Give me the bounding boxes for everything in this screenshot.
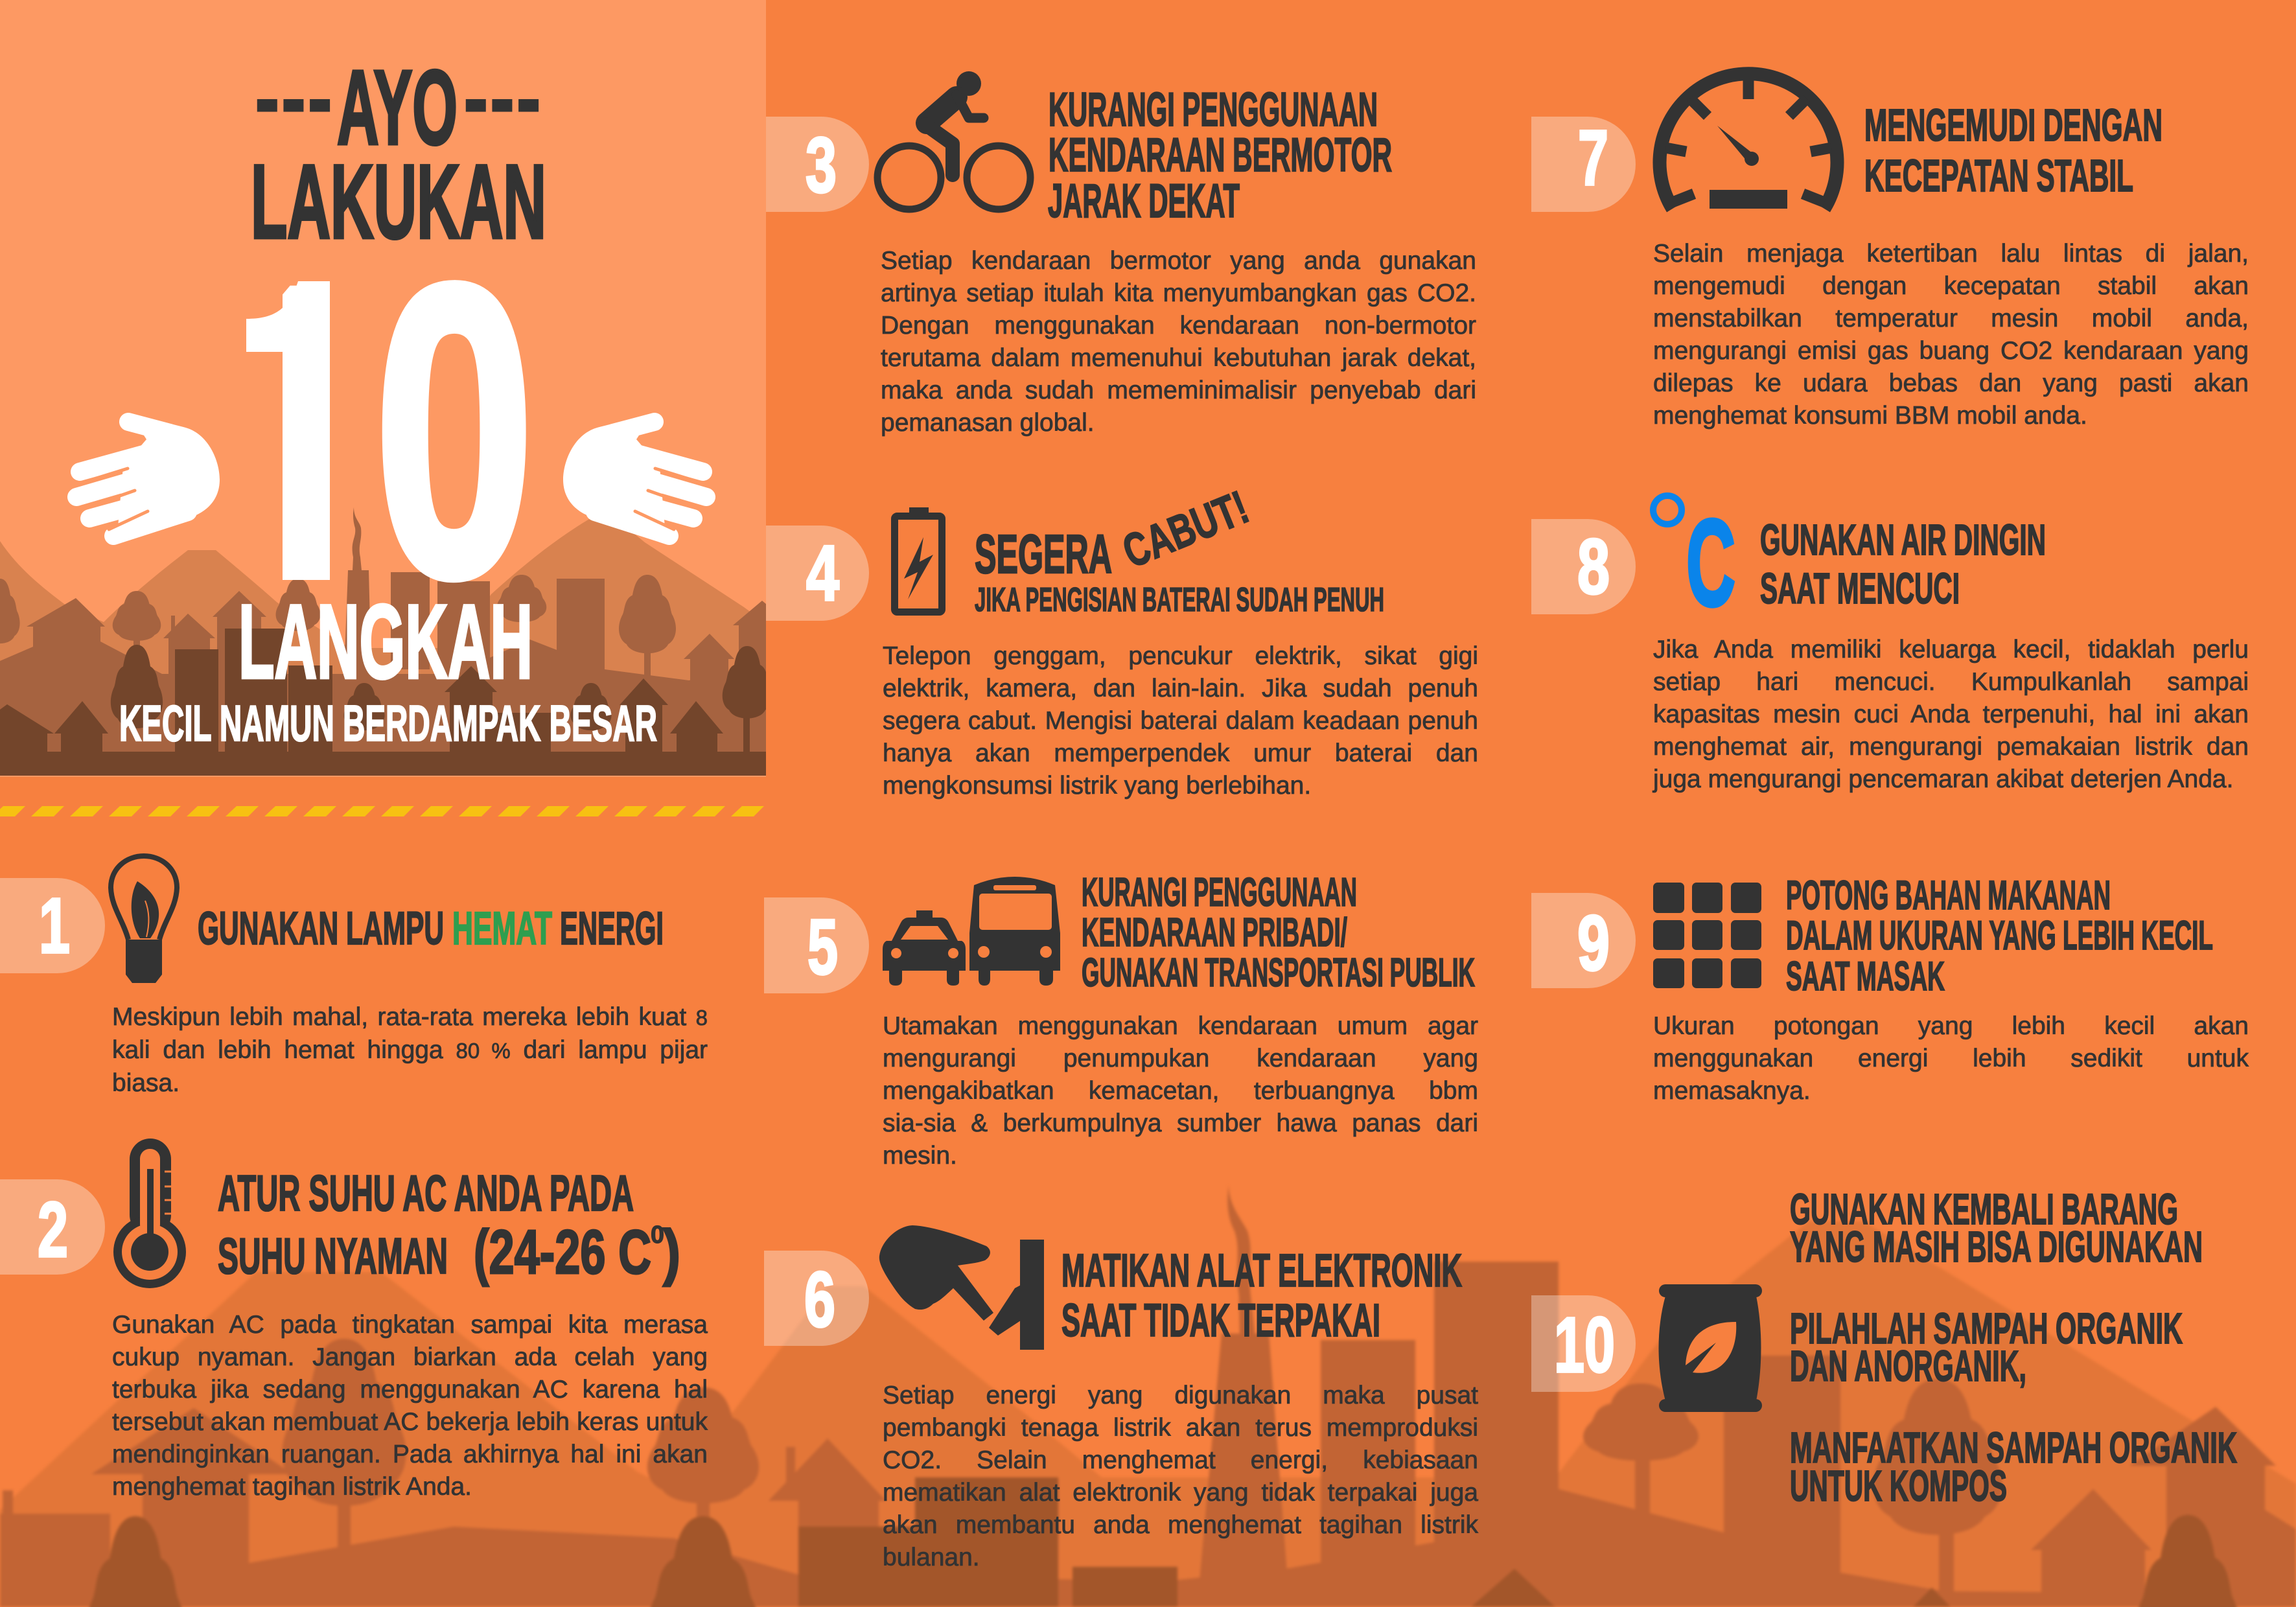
heading 5: KURANGI PENGGUNAAN bbox=[1082, 870, 1357, 915]
badge 1 bbox=[0, 878, 105, 973]
text block: step 5: mengurangi penumpukan kendaraan yang bbox=[883, 1045, 1478, 1072]
text block: step 9: menggunakan energi lebih sedikit untuk bbox=[1653, 1045, 2249, 1072]
badge 7 bbox=[1531, 113, 1636, 212]
badge 10: 10 bbox=[1554, 1301, 1615, 1389]
heading 2: SUHU NYAMAN bbox=[218, 1227, 448, 1284]
badge 2: 2 bbox=[38, 1185, 68, 1273]
heading 2: ) bbox=[663, 1218, 680, 1287]
text block: step 7: menghemat konsumi BBM mobil anda. bbox=[1653, 402, 2087, 430]
text block: step 8: setiap hari mencuci. Kumpulkanlah sampai bbox=[1653, 668, 2249, 696]
text block: step 6: mematikan alat elektronik yang tidak terpakai juga bbox=[883, 1479, 1478, 1507]
heading 6: SAAT TIDAK TERPAKAI bbox=[1061, 1295, 1380, 1347]
title: ayo: --- bbox=[254, 37, 333, 156]
panel: title panel bbox=[0, 0, 772, 777]
text block: step 8: juga mengurangi pencemaran akibat deterjen Anda. bbox=[1653, 765, 2233, 793]
heading 4: CABUT! bbox=[1116, 481, 1255, 578]
text block: step 1 bbox=[112, 1003, 708, 1097]
heading 2: (24-26 C bbox=[474, 1218, 651, 1287]
step 7 bbox=[1531, 74, 2163, 212]
step 1 bbox=[0, 856, 664, 983]
icon: left hand bbox=[76, 413, 220, 542]
text block: step 2: Gunakan AC pada tingkatan sampai kita merasa bbox=[112, 1311, 708, 1339]
heading 8: GUNAKAN AIR DINGIN bbox=[1760, 516, 2046, 564]
text block: step 1: Meskipun lebih mahal, rata-rata mereka lebih kuat 8 bbox=[112, 1003, 708, 1031]
heading 4 bbox=[975, 481, 1384, 619]
heading 4: SEGERA bbox=[975, 524, 1112, 584]
badge 5: 5 bbox=[807, 903, 838, 991]
badge 4 bbox=[766, 526, 869, 621]
text block: step 7: mengurangi emisi gas buang CO2 kendaraan yang bbox=[1653, 337, 2249, 365]
heading 2: 0 bbox=[651, 1221, 664, 1249]
text block: step 4: mengkonsumsi listrik yang berlebihan. bbox=[883, 772, 1311, 800]
text block: step 6: CO2. Selain menghemat energi, kebiasaan bbox=[883, 1446, 1478, 1474]
text block: step 7: Selain menjaga ketertiban lalu lintas di jalan, bbox=[1653, 240, 2249, 268]
title: langkah: LANGKAH bbox=[238, 583, 533, 700]
badge 3 bbox=[766, 117, 869, 212]
badge 1: 1 bbox=[39, 881, 70, 969]
text block: step 8: menghemat air, mengurangi pemakaian listrik dan bbox=[1653, 733, 2249, 761]
badge 6 bbox=[764, 1251, 869, 1346]
heading 5: KENDARAAN PRIBADI/ bbox=[1082, 910, 1347, 955]
text block: step 4: Telepon genggam, pencukur elektrik, sikat gigi bbox=[883, 642, 1478, 670]
step 3 bbox=[766, 71, 1392, 227]
text block: step 1: kali dan lebih hemat hingga 80 % dari lampu pijar bbox=[112, 1036, 708, 1064]
heading 7 bbox=[1864, 100, 2163, 201]
step 5 bbox=[764, 870, 1475, 995]
text block: step 3: artinya setiap itulah kita menyumbangkan gas CO2. bbox=[881, 279, 1476, 307]
text block: step 7: mengemudi dengan kecepatan stabil akan bbox=[1653, 272, 2249, 300]
heading 8: SAAT MENCUCI bbox=[1760, 564, 1960, 613]
heading 3: KURANGI PENGGUNAAN bbox=[1049, 84, 1378, 136]
heading 4: JIKA PENGISIAN BATERAI SUDAH PENUH bbox=[975, 581, 1384, 619]
icon: degree celsius bbox=[1653, 494, 1735, 632]
text block: step 3: terutama dalam memenuhui kebutuhan jarak dekat, bbox=[881, 344, 1476, 372]
decorative stripe: yellow hazard line bbox=[0, 806, 764, 816]
text block: step 4: hanya akan memperpendek umur baterai dan bbox=[883, 739, 1478, 767]
big number 10: 0 bbox=[374, 199, 535, 662]
text block: step 5: sia-sia & berkumpulnya sumber hawa panas dari bbox=[883, 1109, 1478, 1137]
heading 10: DAN ANORGANIK, bbox=[1790, 1342, 2026, 1391]
text block: step 8: kapasitas mesin cuci Anda terpenuhi, hal ini akan bbox=[1653, 700, 2249, 728]
badge 2 bbox=[0, 1179, 105, 1275]
text block: step 4 bbox=[883, 642, 1478, 800]
badge 5 bbox=[764, 897, 869, 993]
text block: step 3: Setiap kendaraan bermotor yang anda gunakan bbox=[881, 247, 1476, 275]
badge 8: 8 bbox=[1577, 522, 1610, 610]
step 4 bbox=[766, 481, 1384, 621]
heading 8 bbox=[1760, 516, 2046, 613]
icon: degree celsius: C bbox=[1686, 494, 1735, 632]
heading 6 bbox=[1061, 1245, 1462, 1347]
big number 10: 1 bbox=[236, 200, 363, 664]
title: ayo: --- bbox=[463, 37, 542, 156]
icon: compost bag bbox=[1659, 1284, 1762, 1412]
heading 3 bbox=[1048, 84, 1392, 227]
heading 2 bbox=[218, 1164, 680, 1287]
heading 5: GUNAKAN TRANSPORTASI PUBLIK bbox=[1082, 951, 1475, 995]
text block: step 2: terbuka jika sedang menggunakan AC karena hal bbox=[112, 1376, 708, 1404]
text block: step 3 bbox=[881, 247, 1476, 437]
badge 6: 6 bbox=[804, 1255, 835, 1343]
background city silhouette bbox=[0, 1185, 2296, 1607]
heading 1: ENERGI bbox=[560, 903, 664, 954]
text block: step 8 bbox=[1652, 636, 2249, 793]
icon: speedometer bbox=[1660, 74, 1837, 209]
heading 9 bbox=[1786, 873, 2213, 999]
heading 10: UNTUK KOMPOS bbox=[1790, 1462, 2007, 1510]
step 6 bbox=[764, 1225, 1462, 1350]
text block: step 7: dilepas ke udara bebas dan yang pasti akan bbox=[1653, 369, 2249, 397]
text block: step 3: pemanasan global. bbox=[881, 409, 1095, 437]
text block: step 6: pembangki tenaga listrik akan terus memproduksi bbox=[883, 1414, 1478, 1442]
badge 8 bbox=[1531, 519, 1636, 614]
heading 3: JARAK DEKAT bbox=[1048, 175, 1240, 227]
text block: step 6: bulanan. bbox=[883, 1543, 980, 1571]
badge 4: 4 bbox=[806, 529, 839, 617]
title: ayo: AYO bbox=[337, 48, 458, 167]
icon: cyclist bbox=[877, 71, 1030, 209]
step 9 bbox=[1531, 873, 2213, 999]
heading 9: SAAT MASAK bbox=[1786, 954, 1945, 999]
heading 6: MATIKAN ALAT ELEKTRONIK bbox=[1061, 1245, 1462, 1297]
icon: bus bbox=[969, 877, 1060, 986]
text block: step 7: menstabilkan temperatur mesin mobil anda, bbox=[1653, 305, 2249, 332]
icon: cut pieces grid bbox=[1653, 883, 1761, 988]
text block: step 9: memasaknya. bbox=[1653, 1077, 1811, 1105]
text block: step 1: biasa. bbox=[112, 1069, 180, 1097]
title: ayo bbox=[254, 37, 542, 167]
icon: taxi bbox=[883, 910, 966, 986]
heading 1: HEMAT bbox=[452, 903, 552, 954]
text block: step 9: Ukuran potongan yang lebih kecil akan bbox=[1653, 1012, 2249, 1040]
badge 3: 3 bbox=[806, 121, 837, 209]
text block: step 2: menghemat tagihan listrik Anda. bbox=[112, 1473, 472, 1501]
badge 9 bbox=[1531, 893, 1636, 988]
badge 9: 9 bbox=[1577, 899, 1610, 987]
heading 2: ATUR SUHU AC ANDA PADA bbox=[218, 1164, 634, 1221]
text block: step 7 bbox=[1653, 240, 2249, 430]
text block: step 5: mengakibatkan kemacetan, terbuangnya bbm bbox=[883, 1077, 1478, 1105]
text block: step 8: Jika Anda memiliki keluarga kecil, tidaklah perlu bbox=[1653, 636, 2249, 664]
text block: step 3: Dengan menggunakan kendaraan non-bermotor bbox=[881, 312, 1476, 340]
heading 1: GUNAKAN LAMPU bbox=[198, 903, 444, 954]
text block: step 5: Utamakan menggunakan kendaraan umum agar bbox=[883, 1012, 1478, 1040]
badge 10 bbox=[1531, 1295, 1636, 1392]
icon: thermometer bbox=[113, 1139, 186, 1288]
text block: step 4: segera cabut. Mengisi baterai dalam keadaan penuh bbox=[883, 707, 1478, 735]
title: lakukan: LAKUKAN bbox=[251, 143, 546, 260]
text block: step 5 bbox=[883, 1012, 1478, 1170]
big number 10 bbox=[246, 280, 526, 583]
text block: step 2: mendinginkan ruangan. Pada akhirnya hal ini akan bbox=[112, 1440, 708, 1468]
heading 5 bbox=[1082, 870, 1475, 995]
icon: battery bbox=[894, 507, 942, 612]
text block: step 6: akan membantu anda menghemat tagihan listrik bbox=[883, 1511, 1478, 1539]
icon: light bulb bbox=[111, 856, 177, 983]
text block: step 3: maka anda sudah mememinimalisir penyebab dari bbox=[881, 376, 1476, 404]
icon: hand pressing switch bbox=[879, 1225, 1044, 1350]
illustration: city skyline in title panel bbox=[0, 507, 772, 776]
text block: step 6 bbox=[883, 1382, 1479, 1571]
text block: step 5: mesin. bbox=[883, 1142, 957, 1170]
subtitle: KECIL NAMUN BERDAMPAK BESAR bbox=[119, 695, 657, 752]
text block: step 2: cukup nyaman. Jangan biarkan ada celah yang bbox=[112, 1343, 708, 1371]
icon: right hand bbox=[563, 413, 706, 542]
text block: step 2 bbox=[112, 1311, 708, 1501]
text block: step 6: Setiap energi yang digunakan maka pusat bbox=[883, 1382, 1478, 1409]
text block: step 2: tersebut akan membuat AC bekerja lebih keras untuk bbox=[112, 1408, 708, 1436]
step 2 bbox=[0, 1139, 680, 1288]
heading 3: KENDARAAN BERMOTOR bbox=[1049, 129, 1392, 181]
text block: step 4: elektrik, kamera, dan lain-lain. Jika sudah penuh bbox=[883, 675, 1478, 702]
badge 7: 7 bbox=[1578, 113, 1608, 202]
step 8 bbox=[1531, 494, 2046, 632]
heading 10 bbox=[1790, 1185, 2237, 1510]
step 10 bbox=[1531, 1185, 2237, 1510]
text block: step 9 bbox=[1653, 1012, 2249, 1105]
